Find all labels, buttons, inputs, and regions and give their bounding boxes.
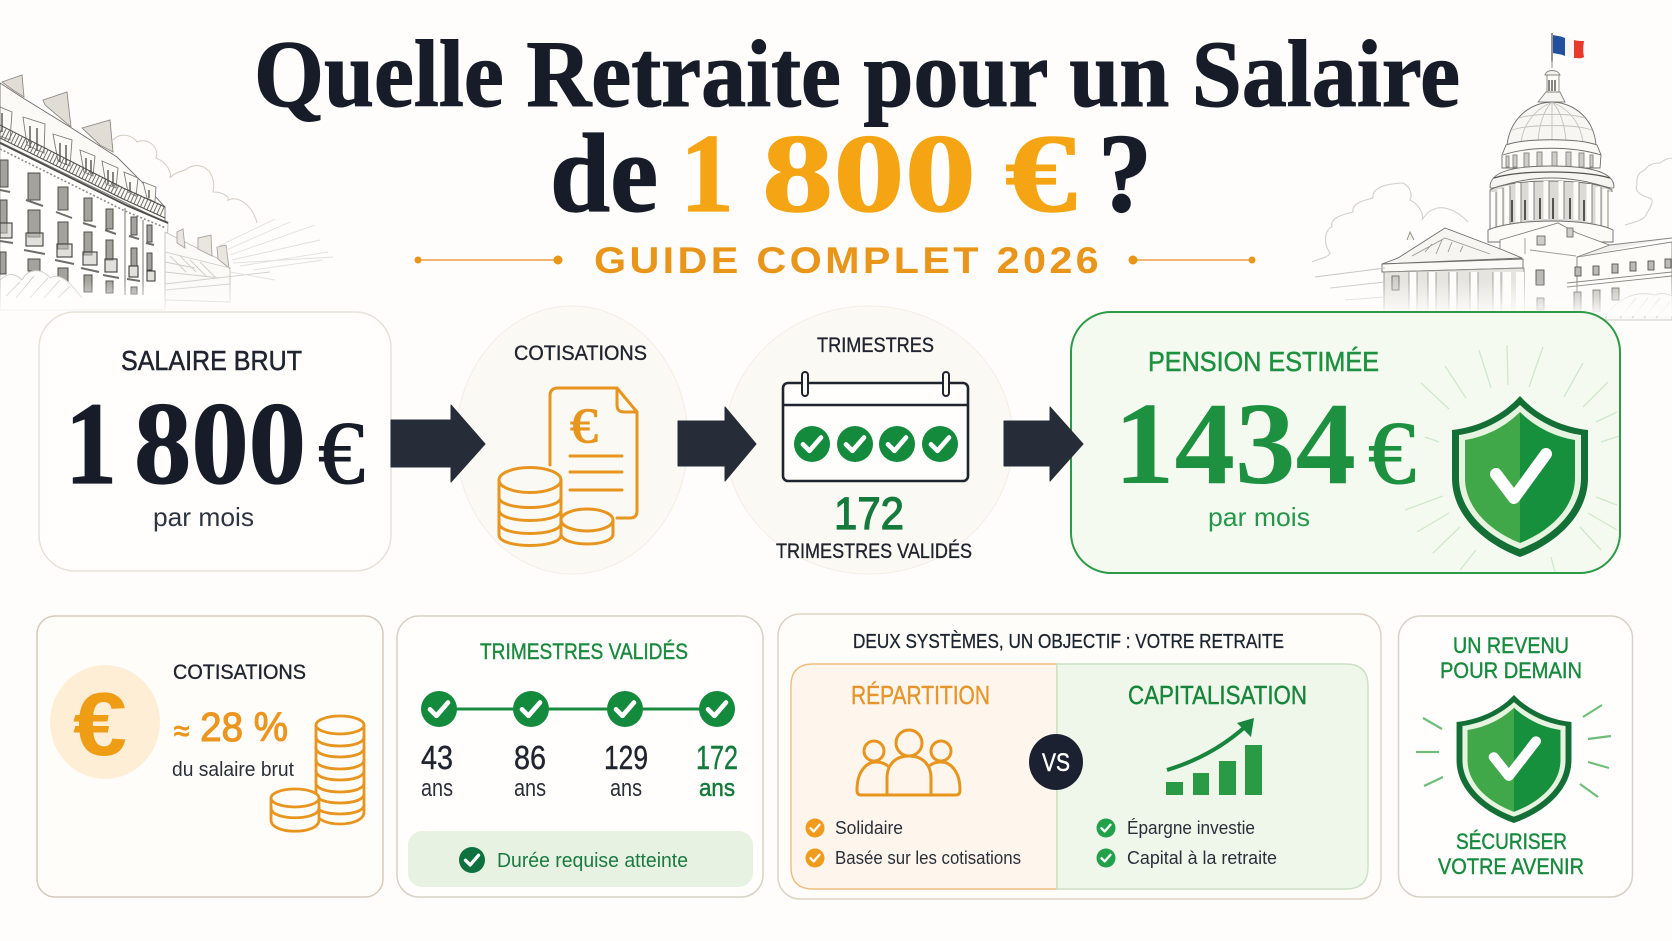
panel: pension estimée: € bbox=[1368, 404, 1416, 503]
distant building bbox=[165, 232, 230, 302]
panel: pension estimée bbox=[1071, 312, 1620, 573]
sub-panel: répartition bbox=[791, 664, 1057, 889]
subtitle with rules bbox=[414, 240, 1256, 281]
title line 2: 1 bbox=[680, 112, 734, 236]
panel: deux systèmes: DEUX SYSTÈMES, UN OBJECTIF : VOTRE RETRAITE bbox=[853, 630, 1284, 653]
list: répartition: Solidaire bbox=[835, 818, 903, 838]
drum bbox=[1502, 140, 1601, 168]
panel: cotisations circle: COTISATIONS bbox=[514, 342, 647, 365]
right wing bbox=[1577, 242, 1672, 320]
icon: euro disc: € bbox=[73, 675, 127, 775]
panel: cotisations circle: € bbox=[570, 397, 598, 453]
badge: VS: VS bbox=[1042, 749, 1070, 777]
panel: pension estimée: 1434 bbox=[1114, 378, 1356, 509]
façade bbox=[0, 142, 168, 310]
bushes bbox=[0, 271, 82, 298]
panel: trimestres validés timeline: ans bbox=[514, 775, 546, 802]
panel: un revenu pour demain bbox=[1398, 616, 1632, 897]
panel: salaire brut: 800 bbox=[134, 378, 306, 509]
hatched hills bbox=[217, 219, 333, 280]
balconies bbox=[0, 223, 155, 281]
portico bbox=[1384, 268, 1524, 320]
illustration: domed monument with French flag bbox=[1312, 33, 1672, 320]
callout: durée requise bbox=[408, 831, 753, 887]
panel: trimestres validés timeline: ans bbox=[699, 775, 735, 802]
icon: people bbox=[857, 730, 960, 795]
subtitle with rules: GUIDE COMPLET 2026 bbox=[594, 240, 1102, 281]
panel: cotisations detail: ≈ 28 % bbox=[174, 704, 288, 750]
panel: un revenu pour demain: UN REVENU bbox=[1453, 633, 1569, 658]
panel: trimestres validés timeline: 86 bbox=[514, 739, 546, 776]
pediment bbox=[1382, 228, 1522, 264]
colonnade base bbox=[1488, 221, 1613, 242]
panel: trimestres validés timeline: 129 bbox=[604, 739, 648, 776]
panel: un revenu pour demain: VOTRE AVENIR bbox=[1438, 854, 1584, 879]
icon: document and coins bbox=[499, 388, 637, 546]
panel: salaire brut: 1 bbox=[65, 378, 117, 509]
badge: VS bbox=[1029, 734, 1083, 790]
mansard roof bbox=[0, 83, 165, 222]
icon: calendar with checks bbox=[783, 372, 968, 481]
panel: trimestres validés timeline: 172 bbox=[696, 739, 738, 776]
arrow 1 bbox=[391, 405, 485, 482]
colonnade bbox=[1490, 181, 1612, 232]
arrow 3 bbox=[1004, 407, 1083, 481]
panel: trimestres circle: TRIMESTRES VALIDÉS bbox=[776, 540, 972, 563]
panel: salaire brut: SALAIRE BRUT bbox=[121, 345, 302, 376]
icon: coin stacks bbox=[271, 716, 364, 831]
window ledges bbox=[0, 190, 154, 245]
icon: shield bbox=[1452, 396, 1588, 557]
list: capitalisation: Épargne investie bbox=[1127, 818, 1255, 838]
panel: deux systèmes bbox=[778, 614, 1381, 899]
cloud bbox=[113, 135, 257, 223]
icon: euro disc bbox=[50, 665, 160, 779]
panel: salaire brut: par mois bbox=[153, 502, 254, 532]
callout: durée requise: Durée requise atteinte bbox=[497, 850, 688, 872]
panel: cotisations circle bbox=[456, 306, 688, 574]
dome bbox=[1507, 102, 1596, 145]
title bbox=[254, 21, 1460, 236]
list: capitalisation bbox=[1096, 818, 1277, 868]
title line 2: 800 bbox=[762, 112, 976, 236]
dormers bbox=[0, 107, 156, 202]
icon: shield bbox=[1457, 695, 1571, 823]
panel: pension estimée: PENSION ESTIMÉE bbox=[1148, 346, 1379, 377]
chimneys bbox=[2, 75, 113, 152]
list: répartition bbox=[806, 818, 1021, 868]
list: capitalisation: Capital à la retraite bbox=[1127, 848, 1277, 868]
panel: salaire brut: € bbox=[318, 404, 365, 503]
icon: rays bbox=[1416, 705, 1611, 797]
panel: cotisations detail: du salaire brut bbox=[172, 759, 294, 781]
windows bbox=[0, 160, 152, 294]
panel: trimestres validés timeline: TRIMESTRES VALIDÉS bbox=[480, 639, 688, 664]
main block bbox=[1500, 223, 1612, 320]
lantern bbox=[1545, 60, 1560, 75]
arrow 2 bbox=[678, 407, 756, 481]
panel: trimestres validés timeline: ans bbox=[610, 775, 642, 802]
bushes bbox=[1605, 293, 1672, 320]
panel: un revenu pour demain: POUR DEMAIN bbox=[1440, 658, 1582, 683]
panel: trimestres circle bbox=[725, 306, 1013, 574]
title line 2 bbox=[550, 112, 1152, 236]
clouds bbox=[1312, 183, 1468, 262]
title line 1: Quelle Retraite pour un Salaire bbox=[254, 21, 1460, 127]
title line 2: € bbox=[1005, 112, 1077, 236]
panel: salaire brut bbox=[39, 312, 391, 571]
panel: trimestres circle: 172 bbox=[834, 488, 904, 539]
title line 2: de bbox=[550, 112, 658, 236]
panel: trimestres validés timeline: 43 bbox=[421, 739, 453, 776]
panel: pension estimée: par mois bbox=[1208, 502, 1310, 532]
panel: trimestres circle: TRIMESTRES bbox=[817, 334, 934, 357]
low left wing bbox=[1315, 268, 1385, 312]
sub-panel: répartition: RÉPARTITION bbox=[851, 680, 990, 710]
sub-panel: capitalisation: CAPITALISATION bbox=[1128, 680, 1307, 710]
panel: trimestres validés timeline bbox=[397, 616, 763, 897]
panel: trimestres validés timeline: ans bbox=[421, 775, 453, 802]
icon: growth chart bbox=[1166, 718, 1262, 795]
panel: cotisations detail bbox=[37, 616, 383, 897]
illustration: Parisian building bbox=[0, 75, 333, 310]
cornice bbox=[0, 143, 168, 223]
colonnade entablature bbox=[1490, 166, 1614, 188]
sub-panel: capitalisation bbox=[1057, 664, 1368, 889]
fade of illustrations into page bbox=[0, 280, 1672, 316]
icon: flag bbox=[1552, 33, 1584, 62]
panel: cotisations detail: COTISATIONS bbox=[173, 661, 306, 684]
icon: rays bbox=[1405, 345, 1619, 572]
panel: un revenu pour demain: SÉCURISER bbox=[1456, 829, 1567, 854]
balustrade bbox=[0, 132, 165, 212]
list: répartition: Basée sur les cotisations bbox=[835, 848, 1021, 868]
title line 2: ? bbox=[1098, 112, 1152, 236]
